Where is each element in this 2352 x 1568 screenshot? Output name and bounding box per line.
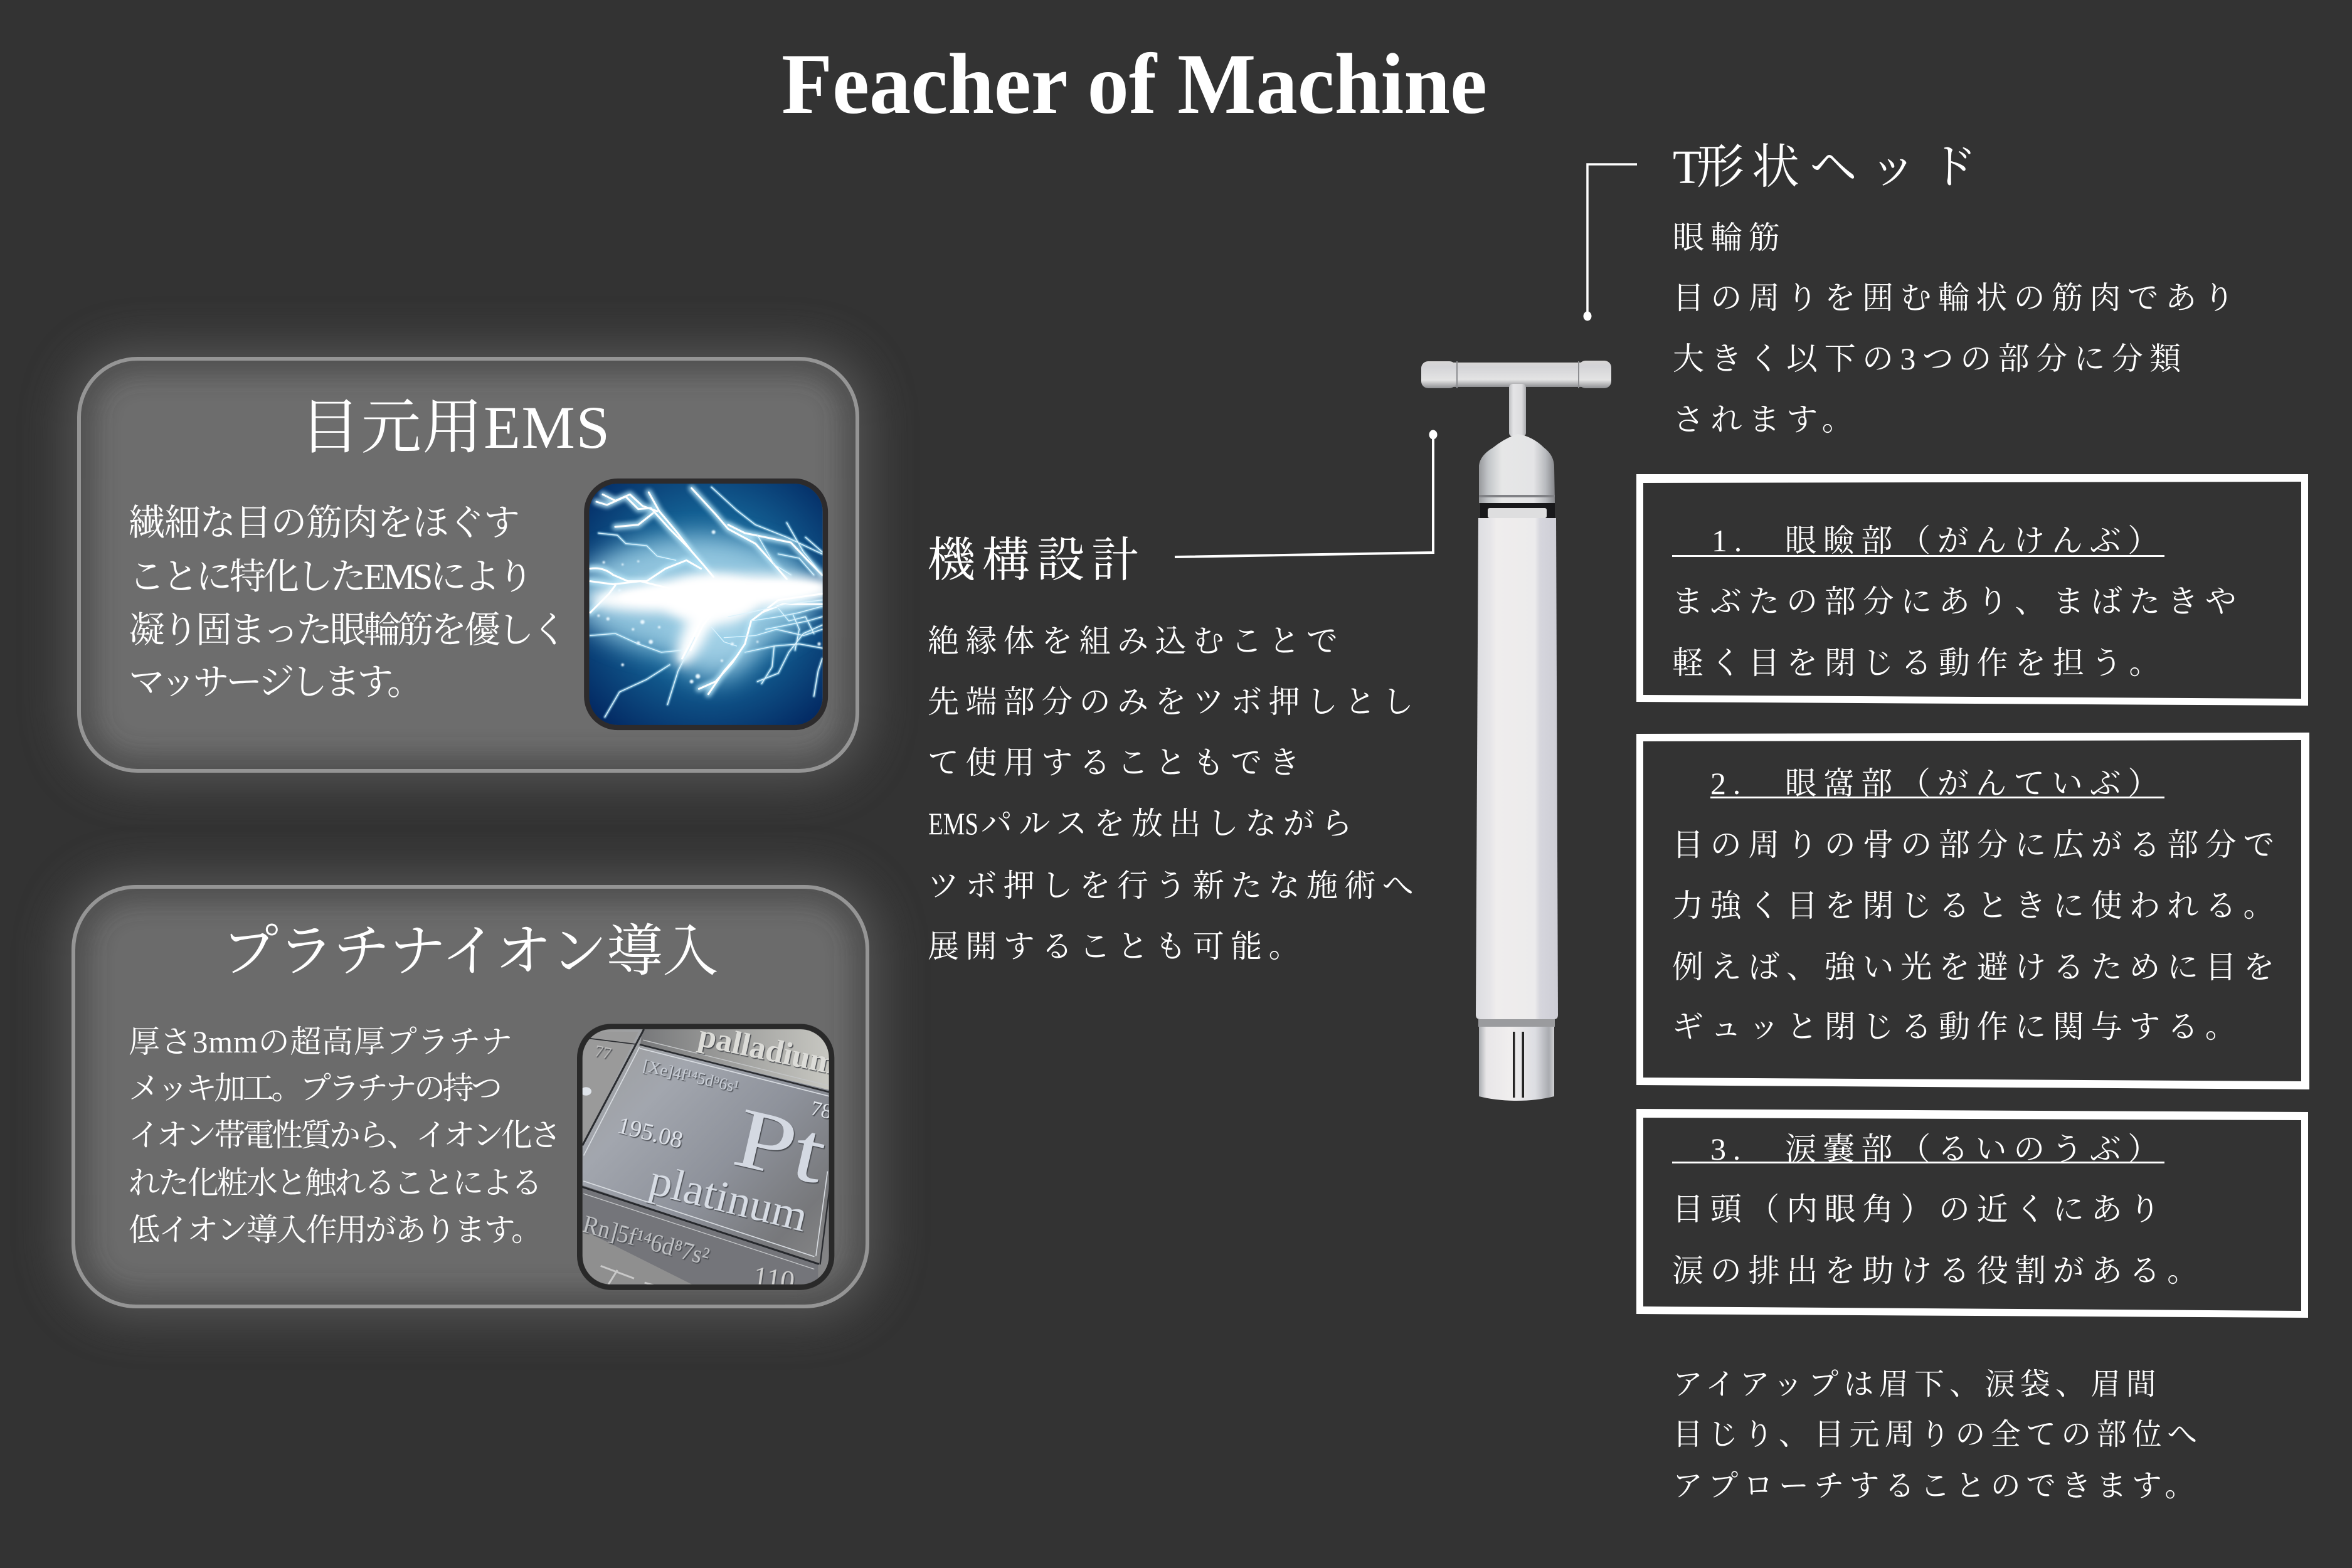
- text block: EMS description: [129, 502, 568, 702]
- dome: [1479, 434, 1555, 503]
- text block: orbicularis description: [1673, 220, 2241, 437]
- heading: mechanism design: 機構設計: [928, 534, 1146, 587]
- title: Feacher of Machine: [781, 36, 1487, 132]
- icon: lightning picture: [573, 481, 842, 728]
- body text: ギュッと閉じる動作に関与する。: [1672, 1009, 2243, 1044]
- body text: まぶたの部分にあり、まばたきや: [1672, 584, 2243, 619]
- leader line: mechanism to body: [1175, 430, 1438, 557]
- electron config Xe: [Xe]4f¹⁴5d⁹6s¹: [641, 1056, 741, 1096]
- text block: mechanism description: て使用することもでき: [928, 745, 1306, 780]
- element name: palladium: palladium: [696, 1018, 840, 1082]
- element number 78: 78: [808, 1096, 834, 1124]
- text block: platinum description: れた化粧水と触れることによる: [129, 1165, 543, 1200]
- text block: orbicularis description: されます。: [1673, 402, 1860, 437]
- panel: platinum ion: [63, 876, 878, 1317]
- text block: EMS description: 繊細な目の筋肉をほぐす: [129, 502, 520, 543]
- black ring: [1480, 503, 1555, 518]
- text block: eye-up summary: [1673, 1368, 2203, 1503]
- element number 110: 110: [751, 1260, 797, 1297]
- body text: 軽く目を閉じる動作を担う。: [1672, 645, 2167, 681]
- atomic mass: 195.08: [615, 1112, 686, 1153]
- text block: mechanism description: 先端部分のみをツボ押しとし: [928, 684, 1420, 719]
- text block: orbicularis description: 眼輪筋: [1673, 220, 1786, 255]
- body text: 例えば、強い光を避けるために目を: [1672, 950, 2281, 985]
- text block: EMS description: マッサージします。: [129, 662, 423, 702]
- body text: 目頭（内眼角）の近くにあり: [1672, 1192, 2167, 1227]
- text block: EMS description: 凝り固まった眼輪筋を優しく: [129, 610, 568, 650]
- text block: platinum description: 厚さ3mmの超高厚プラチナ: [129, 1024, 512, 1059]
- text block: orbicularis description: 目の周りを囲む輪状の筋肉であり: [1673, 280, 2241, 315]
- heading with underline: 涙嚢部（るいのうぶ）: [1785, 1131, 2166, 1167]
- text block: platinum description: 低イオン導入作用があります。: [129, 1212, 543, 1248]
- heading: eye EMS: 目元用EMS: [300, 394, 610, 461]
- text block: platinum description: メッキ加工。プラチナの持つ: [129, 1071, 502, 1106]
- heading with underline: 1.: [1712, 523, 1749, 558]
- bottom cap: [1479, 1027, 1554, 1101]
- text block: mechanism description: [928, 623, 1420, 964]
- panel: eyelid part: [1636, 474, 2308, 706]
- white body: [1476, 518, 1558, 1019]
- text block: mechanism description: 展開することも可能。: [928, 929, 1306, 964]
- T head bar: [1421, 361, 1611, 388]
- panel: eye EMS: [69, 349, 867, 781]
- text block: mechanism description: ツボ押しを行う新たな施術へ: [928, 868, 1420, 903]
- body text: 涙の排出を助ける役割がある。: [1672, 1253, 2205, 1288]
- text block: mechanism description: 絶縁体を組み込むことで: [928, 623, 1344, 659]
- text block: platinum description: [129, 1024, 561, 1248]
- element symbol Pt: Pt: [726, 1089, 835, 1202]
- heading with underline: 2.: [1710, 766, 1747, 801]
- text block: eye-up summary: アプローチすることのできます。: [1673, 1470, 2200, 1503]
- text block: platinum description: イオン帯電性質から、イオン化さ: [129, 1118, 561, 1153]
- body text: 目の周りの骨の部分に広がる部分で: [1672, 827, 2281, 862]
- body text: 力強く目を閉じるときに使われる。: [1672, 888, 2281, 923]
- stem: [1509, 384, 1526, 437]
- text block: eye-up summary: 目じり、目元周りの全ての部位へ: [1673, 1418, 2203, 1451]
- panel: lacrimal part: [1636, 1109, 2308, 1318]
- text block: EMS description: ことに特化したEMSにより: [129, 556, 534, 597]
- heading with underline: 3.: [1710, 1131, 1747, 1167]
- text block: orbicularis description: 大きく以下の3つの部分に分類: [1673, 341, 2188, 376]
- icon: platinum element picture: [580, 1018, 840, 1297]
- heading: platinum ion: プラチナイオン導入: [222, 921, 719, 983]
- text block: mechanism description: EMS: [928, 806, 978, 841]
- heading: T-shaped head: T形状ヘッド: [1673, 141, 1977, 194]
- device: T-shaped head EMS wand: [1421, 361, 1611, 1101]
- heading with underline: 眼瞼部（がんけんぶ）: [1785, 523, 2166, 558]
- electron config Rn: Rn]5f¹⁴6d⁸7s²: [580, 1210, 712, 1271]
- leader line: T head: [1583, 164, 1637, 321]
- collar: [1478, 1019, 1555, 1027]
- body text: [1672, 827, 2281, 1044]
- text block: mechanism description: パルスを放出しながら: [981, 806, 1359, 841]
- body text: [1672, 1192, 2205, 1288]
- element number 77: 77: [593, 1042, 613, 1063]
- element name: platinum: platinum: [645, 1155, 812, 1241]
- heading with underline: 眼窩部（がんていぶ）: [1785, 766, 2166, 801]
- panel: orbital part: [1636, 733, 2309, 1089]
- body text: [1672, 584, 2243, 681]
- text block: eye-up summary: アイアップは眉下、涙袋、眉間: [1673, 1368, 2161, 1401]
